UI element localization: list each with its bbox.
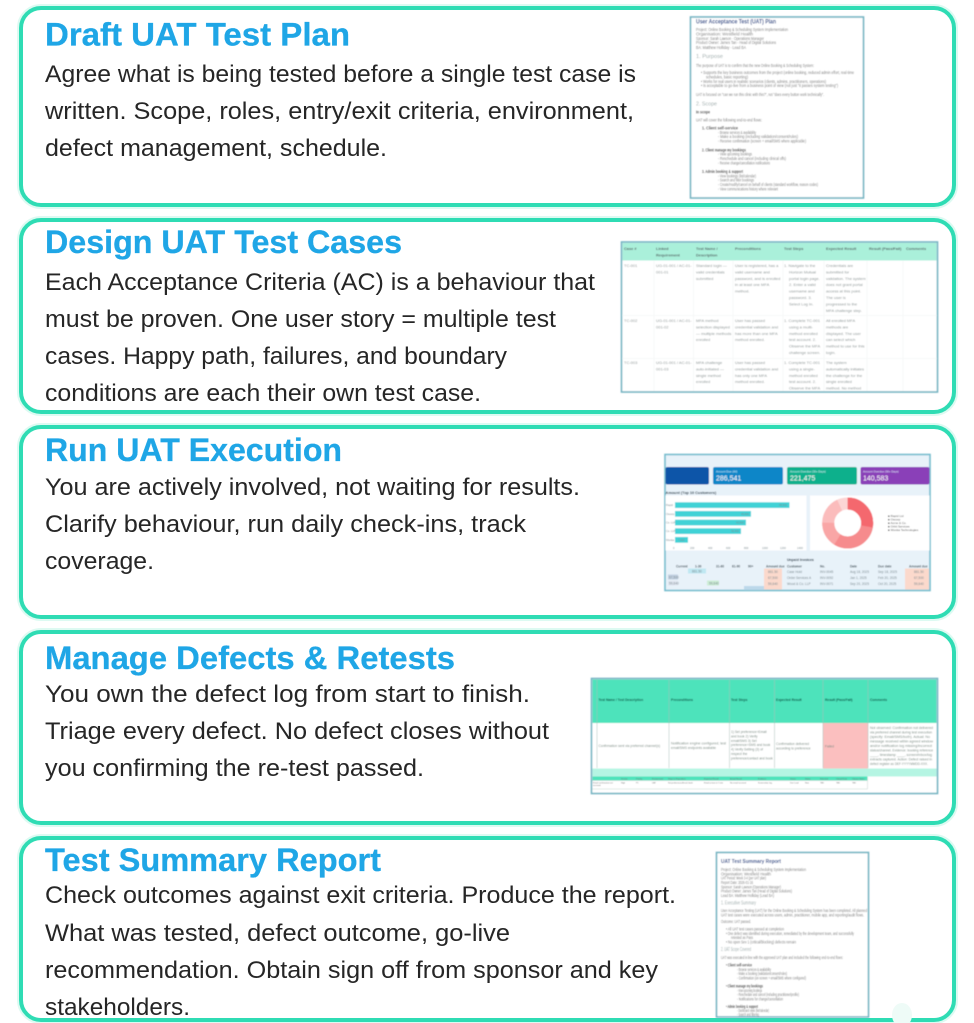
document thumbnail: UAT plan: ◦ Create/modify/cancel on behalf of clients (standard workflow, reason codes) <box>718 182 818 187</box>
document thumbnail: summary report: ◦ Reschedule and cancel (including practitioner/profile) <box>737 992 799 997</box>
table thumbnail: test cases: in at least one MFA <box>735 282 770 287</box>
table thumbnail: test cases: can select which <box>826 337 855 342</box>
tables: Wood & Co. LLP <box>787 582 811 586</box>
document thumbnail: UAT plan: Product Owner: James Tan - Head of Digital Solutions <box>696 40 777 45</box>
document thumbnail: summary report: • Client manage my bookings <box>726 984 763 988</box>
table thumbnail: test cases: 1. Navigate to the <box>784 263 816 268</box>
table thumbnail: test cases <box>622 242 938 392</box>
text block: defect description: You own the defect log from start to finish. <box>45 681 530 708</box>
document thumbnail: UAT plan: ◦ Receive confirmation (screen + email/SMS where applicable) <box>718 138 806 144</box>
tables: 59,640 <box>768 582 778 586</box>
document thumbnail: summary report: Report Date: 2026-01-16 <box>721 880 753 885</box>
donut chart <box>828 504 867 542</box>
text block: test case description: conditions are each their own test case. <box>45 380 481 407</box>
donut legend: ■ Orbit Services <box>888 524 910 528</box>
table thumbnail: defect log: Dev Lead <box>790 782 799 784</box>
donut legend: ■ Oscorp <box>888 518 901 522</box>
table thumbnail: test cases: does not grant portal <box>826 282 863 287</box>
document thumbnail: summary report: ◦ Browse services & availability <box>737 967 771 972</box>
bar chart: Oscorp <box>666 512 675 516</box>
table thumbnail: defect log: Retested <box>820 778 828 780</box>
table thumbnail: defect log <box>592 678 938 794</box>
tables: 59,640 <box>709 582 719 586</box>
table thumbnail: defect log: Test Name / Test Description <box>598 698 643 702</box>
bar chart: 68,500 <box>779 503 787 507</box>
table thumbnail: test cases: 1. Complete TC-001 <box>784 360 821 365</box>
table thumbnail: test cases: submitted for <box>826 269 850 274</box>
table thumbnail: test cases: challenge screen. <box>789 350 820 355</box>
dashboard thumbnail <box>665 454 930 590</box>
KPI cards: Amount Due (All) <box>716 470 737 474</box>
table thumbnail: defect log: Environment <box>652 778 664 780</box>
panel: Manage Defects & Retests <box>21 632 954 823</box>
table thumbnail: test cases: Horizon Mutual <box>789 269 816 274</box>
table thumbnail: defect log: TBD <box>820 782 825 784</box>
table thumbnail: defect log: Set preference=Email, book <box>668 782 693 784</box>
table thumbnail: test cases: 2. Enter a valid <box>789 282 816 287</box>
table thumbnail: test cases: has more than one MFA <box>735 331 778 336</box>
table thumbnail: test cases: Comments <box>906 246 926 251</box>
document thumbnail: UAT plan: Sponsor: Sarah Lawson - Operations Manager <box>696 36 764 41</box>
table thumbnail: test cases: Standard login — <box>696 263 727 268</box>
table thumbnail: test cases: Description <box>696 252 718 258</box>
table thumbnail: test cases: method. No method <box>826 386 861 391</box>
document thumbnail: UAT plan: Organisation: Westfield Health <box>696 32 754 36</box>
table thumbnail: test cases: automatically initiates <box>826 366 864 371</box>
heading: Draft UAT Test Plan: Draft UAT Test Plan <box>45 16 350 52</box>
table thumbnail: test cases: — multiple methods <box>696 331 731 336</box>
bar chart: Wonka <box>666 538 675 542</box>
table thumbnail: test cases: method enrolled <box>789 373 818 378</box>
text block: report description: recommendation. Obtain sign off from sponsor and key <box>45 957 658 984</box>
document thumbnail: summary report: • No open Sev 1 (critical/blocking) defects remain <box>726 939 796 944</box>
donut legend: ■ Acme & Co. <box>888 521 907 525</box>
document thumbnail: summary report: Project: Online Booking & Scheduling System Implementation <box>721 867 806 872</box>
tables: Oct 20, 2025 <box>878 582 896 586</box>
heading: Manage Defects & Retests: Manage Defects & Retests <box>45 640 455 676</box>
table thumbnail: defect log: status/channel. Evidence: booking reference <box>870 748 933 752</box>
KPI cards <box>666 467 930 484</box>
document thumbnail: summary report: • Client self-service <box>726 962 752 968</box>
table thumbnail: defect log: Preconditions <box>671 698 693 702</box>
tables: Amount due <box>766 564 785 568</box>
document thumbnail: UAT plan: User Acceptance Test (UAT) Plan <box>696 20 776 26</box>
tables: Sep 20, 2025 <box>850 582 869 586</box>
document thumbnail: summary report: 2. UAT Scope Covered <box>721 947 751 953</box>
text block: report description <box>45 882 676 1021</box>
table thumbnail: defect log: Actual Result <box>730 778 742 780</box>
table thumbnail: test cases: method enrolled. <box>735 337 765 342</box>
table thumbnail: defect log: Comments <box>870 698 887 702</box>
table thumbnail: defect log: Version <box>621 778 628 780</box>
table thumbnail: defect log: preference/contact and book <box>731 756 773 760</box>
table thumbnail: test cases: method to use for this <box>826 344 864 349</box>
tables: Aug 18, 2025 <box>850 570 869 574</box>
text block: defect description <box>45 681 549 782</box>
table thumbnail: defect log: Evidence <box>758 778 767 780</box>
table thumbnail: defect log: TBD <box>836 782 841 784</box>
table thumbnail: test cases: TC-001 <box>624 263 638 268</box>
table thumbnail: defect log: P1 <box>636 782 639 784</box>
table thumbnail: defect log: received <box>593 785 601 787</box>
table thumbnail: test cases: Test Name / <box>696 246 718 251</box>
document thumbnail: summary report: ◦ Make a booking (validation/consent/rules) <box>737 971 787 976</box>
table thumbnail: test cases: TC-003 <box>624 360 638 365</box>
table thumbnail: test cases: UG-01-001 / AC-01- <box>656 318 692 323</box>
table thumbnail: test cases: submitted <box>696 276 713 281</box>
bar chart: 600 <box>726 546 731 550</box>
document thumbnail: summary report: • One defect was identified during execution, remediated by the development team, and successfully <box>726 931 855 936</box>
table thumbnail: test cases: portal login page. <box>789 276 820 281</box>
table thumbnail: test cases: User is registered, has a <box>735 263 779 268</box>
tables: 861.50 <box>914 570 924 574</box>
bar chart: 1200 <box>780 546 786 550</box>
table thumbnail: test cases: 1. Complete TC-001 <box>784 318 821 323</box>
table thumbnail: defect log: Failed <box>825 744 834 748</box>
table thumbnail: test cases: using a multi- <box>789 324 813 329</box>
tables: Current <box>676 564 688 568</box>
table thumbnail: defect log: Email arrives in 5 min <box>704 782 723 784</box>
document thumbnail: UAT plan: ◦ View bookings (list/calendar) <box>718 173 756 178</box>
table thumbnail: test cases: validation. The system <box>826 276 866 281</box>
table thumbnail: defect log: Confirmation delivered <box>776 742 809 746</box>
tables: Feb 20, 2025 <box>878 576 897 580</box>
document thumbnail: UAT plan: UAT will cover the following end-to-end flows: <box>696 118 762 122</box>
table thumbnail: defect log: Notification engine configured; test <box>671 742 726 746</box>
tables: Customer <box>787 564 803 568</box>
table thumbnail: defect log: UAT <box>652 782 657 784</box>
table thumbnail: defect log: and book 2) Verify <box>731 734 758 738</box>
table thumbnail: test cases: valid username and <box>735 269 770 274</box>
table thumbnail: test cases: credential validation and <box>735 324 778 329</box>
text block: defect description: Triage every defect. No defect closes without <box>45 718 549 745</box>
KPI cards: 140,583 <box>863 476 888 482</box>
document thumbnail: summary report: Product Owner: James Tan (Head of Digital Solutions) <box>721 889 792 894</box>
document thumbnail: summary report: ◦ Dashboard views (list/calendar) <box>737 1008 769 1013</box>
table thumbnail: test cases: All enrolled MFA <box>826 318 855 323</box>
table thumbnail: defect log: and/or notification log missing/incorrect <box>870 744 932 748</box>
document thumbnail: UAT plan: • Works for real users in realistic scenarios (clients, admins, practitioners, operations) <box>701 79 826 84</box>
dashboard thumbnail: Amount (Top 10 Customers) <box>666 491 717 495</box>
text block: report description: What was tested, defect outcome, go-live <box>45 920 510 947</box>
document thumbnail: UAT plan: ◦ Browse services & availability <box>718 130 756 135</box>
tables: Order Services A <box>787 576 812 580</box>
table thumbnail: test cases: test account. 2. <box>789 337 816 342</box>
table thumbnail: defect log: TBD <box>852 782 857 784</box>
bar chart: Co. LLP <box>666 520 676 524</box>
table thumbnail: test cases: password. 3. <box>789 295 812 300</box>
table thumbnail: test cases: Linked <box>656 246 669 251</box>
KPI cards: Amount Overdue (30+ Days) <box>790 470 826 474</box>
heading: Design UAT Test Cases: Design UAT Test Cases <box>45 224 402 260</box>
table thumbnail: test cases: login. <box>826 350 836 355</box>
text block: draft plan description: written. Scope, roles, entry/exit criteria, environment, <box>44 98 634 125</box>
table thumbnail: test cases: enrolled <box>696 337 710 342</box>
tables: Sep 18, 2025 <box>878 570 897 574</box>
tables: Date <box>850 564 857 568</box>
table thumbnail: test cases: Credentials are <box>826 263 854 268</box>
table thumbnail: test cases: Observe the MFA <box>789 344 820 349</box>
table thumbnail: defect log: according to preference <box>776 746 811 750</box>
table thumbnail: test cases: Observe the MFA <box>789 386 820 391</box>
text block: test case description: Each Acceptance Criteria (AC) is a behaviour that <box>45 269 595 296</box>
table thumbnail: defect log: Expected Result <box>704 778 719 780</box>
tables: 59,640 <box>914 582 924 586</box>
table thumbnail: test cases: auto-initiated — <box>696 366 724 371</box>
table thumbnail: defect log: (specify: Email/SMS/both). Actual: No <box>870 735 930 739</box>
bar chart: 1000 <box>762 546 768 550</box>
table thumbnail: defect log: 4) Verify Setting (3) of <box>731 748 763 752</box>
tables: Amount due <box>909 564 928 568</box>
table thumbnail: test cases: method. <box>735 289 749 294</box>
bar chart <box>666 502 803 550</box>
table thumbnail: test cases: The user is <box>826 295 846 300</box>
document thumbnail: UAT plan: 2. Scope <box>696 101 717 107</box>
table thumbnail: defect log: ____, timestamp ____, screen/inbox/log <box>869 753 932 757</box>
text block: test case description: must be proven. One user story = multiple test <box>45 306 556 333</box>
table thumbnail: test cases: enrolled <box>696 379 710 384</box>
document thumbnail: UAT plan: 1. Purpose <box>696 54 723 60</box>
table thumbnail: test cases: UG-01-001 / AC-01- <box>656 360 692 365</box>
document thumbnail: summary report: UAT Period: Week 3-4 (per UAT plan) <box>721 876 766 881</box>
document thumbnail: summary report: retested as Pass <box>731 935 754 940</box>
donut legend <box>888 514 919 532</box>
document thumbnail: UAT plan: BA: Matthew Holliday - Lead BA <box>696 45 746 50</box>
table thumbnail: test cases: password, and is enrolled <box>735 276 780 281</box>
bar chart: 1400 <box>797 546 803 550</box>
table thumbnail: test cases: Test Steps <box>784 246 803 251</box>
donut legend: ■ Wonka Technologies <box>888 528 919 532</box>
document thumbnail: UAT plan: 2. Client manage my bookings <box>702 147 746 152</box>
table thumbnail: test cases: MFA challenge step. <box>826 308 862 313</box>
text block: draft plan description <box>44 61 636 162</box>
tables: No. <box>820 564 825 568</box>
text block: execution description: You are actively involved, not waiting for results. <box>45 474 580 501</box>
panel: Design UAT Test Cases <box>21 220 954 412</box>
document thumbnail: summary report: • All UAT test cases passed at completion <box>726 926 784 932</box>
tables: 31-60 <box>716 564 724 568</box>
document thumbnail: summary report: 1. Executive Summary <box>721 900 756 906</box>
bar chart: 45,600 <box>741 512 749 516</box>
table thumbnail: test cases: MFA challenge <box>696 360 723 365</box>
tables: INV-0071 <box>820 582 834 586</box>
table thumbnail: defect log: Not observed: Confirmation not delivered <box>870 726 933 730</box>
document thumbnail: UAT plan: ◦ Reschedule and cancel (including clinical offs) <box>718 156 786 161</box>
document thumbnail: summary report: UAT was executed in line with the approved UAT plan and included the following end-to-end flows: <box>721 955 843 960</box>
tables: 90+ <box>748 564 754 568</box>
text block: test case description <box>45 269 595 407</box>
table thumbnail: test cases: access at this point. <box>826 289 861 294</box>
document thumbnail: UAT plan: • Is acceptable to go-live from a business point of view (not just "it passes system testing") <box>701 83 838 88</box>
table thumbnail: test cases: 001-03 <box>656 366 669 371</box>
tables: 59,640 <box>669 582 679 586</box>
table thumbnail: defect log: Priority <box>636 778 642 780</box>
tables: INV-0045 <box>820 570 834 574</box>
table thumbnail: defect log: email/SMS endpoints available <box>671 746 716 750</box>
table thumbnail: defect log: Expected Result <box>776 698 803 702</box>
table thumbnail: test cases: 001-01 <box>656 269 669 274</box>
table thumbnail: test cases: 001-02 <box>656 324 669 329</box>
text block: report description: Check outcomes against exit criteria. Produce the report. <box>45 882 676 909</box>
document thumbnail: summary report: ◦ Search and filtering <box>737 1012 759 1017</box>
table thumbnail: defect log: Email confirmation not <box>593 782 613 784</box>
text block: report description: stakeholders. <box>45 994 190 1021</box>
decorative mark at bottom edge <box>892 1003 912 1023</box>
table thumbnail: test cases: Expected Result <box>826 246 857 251</box>
tables: INV-0092 <box>820 576 834 580</box>
bar chart: 0 <box>673 546 675 550</box>
table thumbnail: defect log: respect the <box>731 752 747 756</box>
table thumbnail: defect log: Result (Pass/Fail) <box>825 698 852 702</box>
table thumbnail: defect log: email/SMS 3) Set <box>731 739 757 743</box>
table thumbnail: test cases: single method <box>696 373 721 378</box>
table thumbnail: test cases: single enrolled <box>826 379 852 384</box>
table thumbnail: defect log: Closure Notes <box>852 778 865 780</box>
KPI cards: 221,475 <box>790 476 815 482</box>
document thumbnail: UAT plan: ◦ View upcoming bookings <box>718 152 753 156</box>
text block: test case description: cases. Happy path, failures, and boundary <box>45 343 507 370</box>
panel: Test Summary Report <box>21 838 954 1021</box>
table thumbnail: defect log: 1) Set preference=Email <box>731 730 767 734</box>
table thumbnail: test cases: credential validation and <box>735 366 778 371</box>
table thumbnail: test cases: Preconditions <box>735 246 761 251</box>
table thumbnail: test cases: the challenge for the <box>826 373 863 378</box>
bar chart: Rapid <box>666 503 673 507</box>
bar chart: 39,400 <box>731 529 739 533</box>
document thumbnail: UAT plan: ◦ View communications history where relevant <box>718 186 779 191</box>
table thumbnail: test cases: method enrolled <box>789 331 818 336</box>
tables: 67,500 <box>669 576 679 580</box>
table thumbnail: test cases: UG-01-001 / AC-01- <box>656 263 692 268</box>
heading: Run UAT Execution: Run UAT Execution <box>45 432 342 468</box>
tables <box>668 558 929 590</box>
table thumbnail: defect log: New <box>805 782 810 784</box>
tables: 1-30 <box>695 564 702 568</box>
document thumbnail: summary report: • Admin booking & support <box>726 1004 758 1009</box>
table thumbnail: test cases: Requirement <box>656 252 680 258</box>
heading: Test Summary Report: Test Summary Report <box>45 842 381 878</box>
donut legend: ■ Rapid Ltd <box>888 514 904 518</box>
table thumbnail: defect log: message received within agreed window <box>870 740 934 744</box>
table thumbnail: defect log: Test Steps <box>731 698 748 702</box>
KPI cards: Amount Overdue (90+ Days) <box>863 470 899 474</box>
document thumbnail: summary report: ◦ Notifications for change/cancellation <box>737 996 783 1001</box>
document thumbnail: summary report: Organisation: Westfield Health <box>721 871 771 876</box>
table thumbnail: test cases: username and <box>789 289 815 294</box>
document thumbnail: summary report: UAT test cases were executed across users, admin, practitioner, mobile app, and reporting/audit flows. <box>721 912 864 917</box>
document thumbnail: UAT plan: 3. Admin booking & support <box>702 169 743 174</box>
document thumbnail: UAT plan: In scope <box>696 109 710 114</box>
text block: execution description: coverage. <box>45 548 154 575</box>
table thumbnail: test cases: progressed to the <box>826 301 858 306</box>
table thumbnail: defect log: Owner <box>790 778 796 780</box>
tables: 67,500 <box>768 576 778 580</box>
table thumbnail: defect log: Closed Date <box>836 778 848 780</box>
document thumbnail: UAT plan: schedules, basic reporting) <box>706 74 748 80</box>
document thumbnail: summary report: Outcome: UAT passed. <box>721 919 751 924</box>
table thumbnail: defect log: Confirmation sent via preferred channel(s) <box>598 744 660 748</box>
panel: Draft UAT Test Plan <box>21 8 954 205</box>
table thumbnail: test cases: displayed. The user <box>826 331 862 336</box>
document thumbnail: summary report: Sponsor: Sarah Lawson (Operations Manager) <box>721 884 781 889</box>
table thumbnail: test cases: test account. 2. <box>789 379 816 384</box>
document thumbnail: summary report: ◦ View upcoming bookings <box>737 988 762 993</box>
text block: draft plan description: Agree what is being tested before a single test case is <box>45 61 636 88</box>
bar chart: Co. LLP <box>666 529 676 533</box>
bar chart: 400 <box>708 546 713 550</box>
table thumbnail: defect log: Screenshot, log <box>758 782 772 784</box>
tables: 67,500 <box>914 576 924 580</box>
document thumbnail: UAT plan: The purpose of UAT is to confirm that the new Online Booking & Scheduling System: <box>696 63 814 68</box>
table thumbnail: test cases: User has passed <box>735 360 765 365</box>
table thumbnail: test cases: Result (Pass/Fail) <box>869 246 902 251</box>
table thumbnail: test cases: MFA method <box>696 318 718 323</box>
document thumbnail: UAT plan: ◦ Search and filter bookings <box>718 178 755 183</box>
KPI cards: 286,541 <box>716 476 741 482</box>
document thumbnail: UAT plan: ◦ Make a booking (including validation/consent/rules) <box>718 134 798 139</box>
document thumbnail: summary report: User Acceptance Testing (UAT) for the Online Booking & Scheduling System has been completed. All planned <box>721 908 867 913</box>
table thumbnail: defect log: defect register as DEF-YYYYMMDD-XXX. <box>870 762 928 766</box>
table thumbnail: test cases: method enrolled. <box>735 379 765 384</box>
table thumbnail: test cases: The system <box>826 360 847 365</box>
tables: Due date <box>878 564 892 568</box>
tables: 861.50 <box>692 570 702 574</box>
document thumbnail: UAT plan: 1. Client self-service <box>702 126 738 130</box>
text block: draft plan description: defect management, schedule. <box>45 135 387 162</box>
document thumbnail: UAT plan: ◦ Receive change/cancellation notifications <box>718 160 771 165</box>
table thumbnail: test cases: methods are <box>826 324 849 329</box>
document thumbnail: summary report: UAT Test Summary Report <box>721 859 781 865</box>
text block: execution description <box>45 474 580 575</box>
document thumbnail: UAT plan: UAT is focused on "can we run this clinic with this?", not "does every button work technically". <box>696 92 824 97</box>
table thumbnail: defect log: preference=SMS and book <box>731 743 771 747</box>
document thumbnail: UAT plan: • Supports the key business outcomes from the project (online booking, reduced admin effort, real-time <box>701 70 854 75</box>
bar chart: 42,500 <box>736 520 744 524</box>
tables: Case Hold <box>787 570 802 574</box>
tables: Jan 1, 2025 <box>850 576 867 580</box>
table thumbnail: defect log: extracts captured. Action: Defect raised in <box>870 758 932 762</box>
bar chart: 800 <box>744 546 749 550</box>
bar chart: 7,600 <box>678 538 685 542</box>
document thumbnail: UAT plan <box>690 17 864 198</box>
document thumbnail: summary report: ◦ Confirmation (on-screen + email/SMS where configured) <box>737 975 806 980</box>
table thumbnail: test cases: Select Log In. <box>789 301 813 306</box>
table thumbnail: test cases: Case # <box>624 246 637 251</box>
tables: Unpaid Invoices <box>787 558 814 562</box>
table thumbnail: defect log: No email received <box>730 782 746 784</box>
table thumbnail: defect log: High <box>621 782 625 784</box>
table thumbnail: defect log: Status <box>805 778 811 780</box>
text block: execution description: Clarify behaviour, run daily check-ins, track <box>45 511 527 538</box>
document thumbnail: summary report <box>716 852 868 1017</box>
table thumbnail: test cases: User has passed <box>735 318 765 323</box>
table thumbnail: test cases: selection displayed <box>696 324 730 329</box>
panel: Run UAT Execution <box>21 427 954 617</box>
table thumbnail: test cases: has only one MFA <box>735 373 767 378</box>
document thumbnail: summary report: Lead BA: Matthew Holliday (Lead BA) <box>721 893 774 898</box>
table thumbnail: test cases: valid credentials <box>696 269 725 274</box>
document thumbnail: UAT plan: Project: Online Booking & Scheduling System Implementation <box>696 27 788 32</box>
table thumbnail: test cases: TC-002 <box>624 318 638 323</box>
table thumbnail: defect log: Steps to Reproduce <box>668 778 687 780</box>
tables: 61-90 <box>732 564 740 568</box>
table thumbnail: test cases: using a single- <box>789 366 815 371</box>
tables: 861.50 <box>768 570 778 574</box>
text block: defect description: you confirming the re-test passed. <box>45 755 424 782</box>
table thumbnail: defect log: via preferred channel during test execution <box>870 730 932 734</box>
bar chart: 200 <box>690 546 695 550</box>
